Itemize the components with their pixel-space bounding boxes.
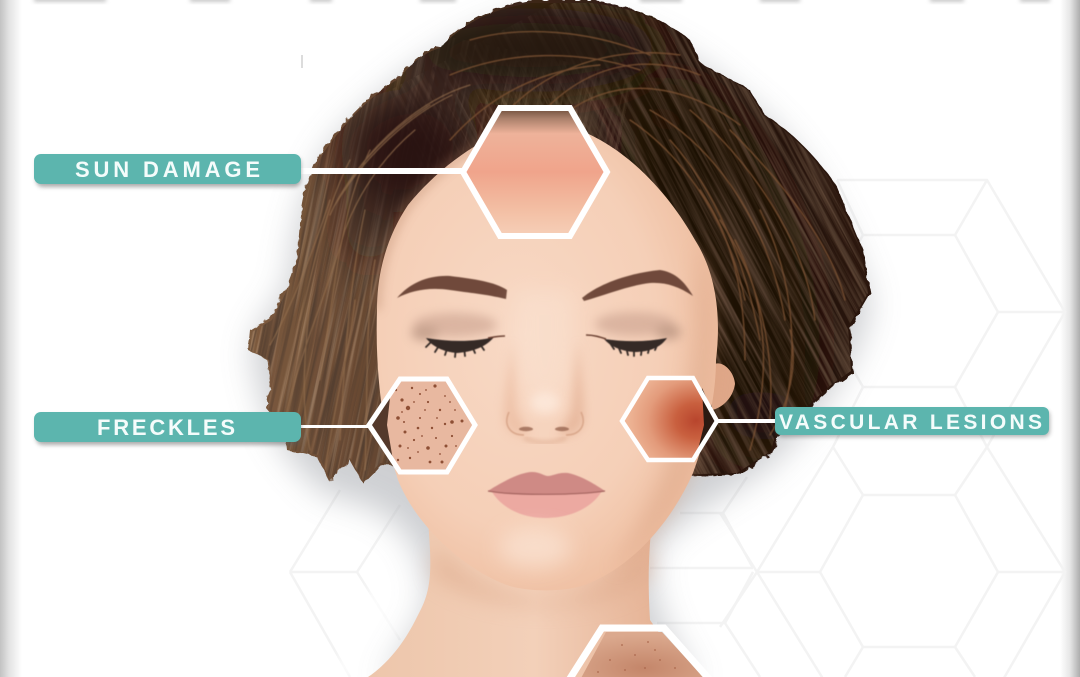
right eyelashes	[586, 335, 667, 356]
hair strand texture right	[392, 3, 866, 474]
small tick artifact	[301, 55, 303, 68]
face	[377, 122, 718, 590]
label: sun damage: SUN DAMAGE	[75, 157, 260, 182]
label: sun damage	[34, 154, 301, 187]
white glow around neck	[330, 500, 420, 677]
connector: vascular lesions	[716, 419, 776, 423]
label: vascular lesions: VASCULAR LESIONS	[779, 411, 1042, 434]
lips	[488, 472, 605, 518]
left eye shadow	[411, 313, 497, 341]
hexagon: freckles	[369, 379, 475, 472]
nose	[504, 290, 584, 442]
hexagon: chest skin	[569, 628, 710, 677]
head drop shadow	[252, 14, 870, 677]
page edge shading left	[0, 0, 22, 677]
left eyebrow	[397, 276, 507, 299]
left eyelashes	[426, 336, 505, 357]
background hexagon pattern	[290, 180, 1065, 677]
label: freckles: FRECKLES	[97, 415, 235, 440]
right face shade	[610, 240, 714, 574]
hexagon: sun damage	[463, 108, 607, 236]
right eye shadow	[595, 312, 681, 340]
hair dark depth patches right	[575, 52, 860, 470]
neck shadow under chin	[432, 540, 651, 607]
hair strands	[270, 32, 845, 470]
woman portrait	[248, 0, 872, 677]
connector: sun damage	[300, 168, 463, 174]
hair mass	[248, 0, 872, 484]
hair crown and temple shading	[340, 8, 660, 265]
neck	[368, 520, 702, 677]
hair strand texture left	[250, 41, 632, 480]
chin highlight	[499, 528, 571, 568]
page edge shading right	[1060, 0, 1080, 677]
hair strand dark texture right	[389, 3, 868, 474]
right eyebrow	[582, 270, 693, 301]
hairline shadow	[377, 122, 552, 310]
hexagon: vascular lesions	[622, 378, 717, 460]
connector: freckles	[300, 425, 370, 428]
ear	[712, 363, 735, 410]
label: freckles	[34, 412, 301, 445]
cropped title remnant	[34, 0, 1050, 2]
